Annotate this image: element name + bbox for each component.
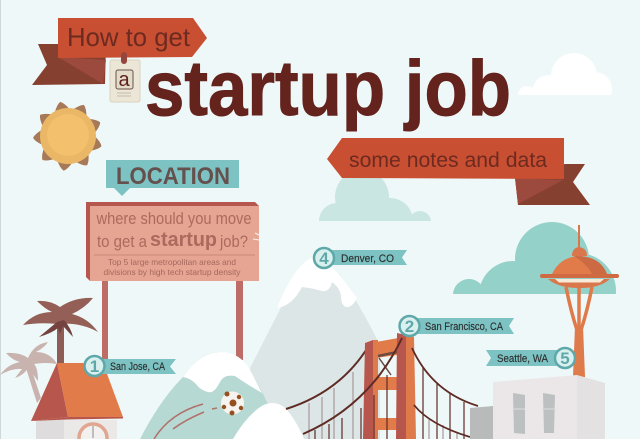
location tag 5: Seattle: Seattle, WA bbox=[497, 353, 549, 365]
location tag 2: San Francisco: 2 bbox=[405, 317, 414, 336]
location tag 4: Denver: 4 bbox=[319, 249, 329, 268]
heading: LOCATION bbox=[106, 160, 239, 196]
location tag 2: San Francisco: San Francisco, CA bbox=[425, 321, 504, 333]
back cable bbox=[286, 347, 368, 409]
location tag 1: San Jose: 1 bbox=[90, 357, 99, 376]
billboard posts bbox=[102, 280, 243, 370]
ribbon: How to get bbox=[32, 18, 207, 85]
mountain: Denver grey peak bbox=[250, 257, 380, 439]
windows bbox=[513, 393, 555, 434]
ribbon: some notes and data bbox=[327, 138, 590, 205]
location tag 1: San Jose: San Jose, CA bbox=[110, 361, 166, 373]
billboard panel bbox=[86, 202, 259, 281]
tower: Seattle Space Needle bbox=[540, 225, 619, 377]
location tag 5: Seattle bbox=[486, 348, 575, 368]
cloud: white top right bbox=[518, 53, 612, 95]
location tag 5: Seattle: 5 bbox=[560, 349, 570, 368]
billboard headline second line bbox=[97, 229, 248, 251]
needle legs bbox=[566, 287, 592, 330]
location tag 4: Denver: Denver, CO bbox=[341, 253, 394, 265]
icon: sun bbox=[33, 100, 104, 172]
icon: soccer ball bbox=[221, 392, 244, 416]
mountain: front white snow peak bbox=[233, 403, 304, 439]
ribbon text: How to get bbox=[67, 22, 191, 52]
tower near pillars bbox=[363, 340, 373, 439]
building: San Jose clock tower bbox=[31, 363, 123, 439]
billboard headline second line: job? bbox=[219, 233, 248, 251]
billboard headline: where should you move bbox=[96, 210, 252, 228]
billboard headline second line: startup bbox=[150, 229, 217, 251]
location tag 2: San Francisco bbox=[400, 316, 514, 336]
suspenders bbox=[315, 368, 464, 439]
icon: badge with letter a: a bbox=[118, 69, 130, 91]
billboard subtext: divisions by high tech startup density bbox=[104, 267, 241, 277]
icon: badge with letter a bbox=[110, 52, 140, 102]
icon: pale palm tree bbox=[0, 342, 57, 403]
billboard subtext: Top 5 large metropolitan areas and bbox=[108, 257, 236, 267]
billboard headline second line: to get a bbox=[97, 233, 148, 251]
location tag 4: Denver bbox=[314, 248, 407, 268]
motion lines bbox=[154, 404, 217, 439]
heading: LOCATION: LOCATION bbox=[116, 163, 230, 190]
billboard subtext bbox=[104, 257, 241, 277]
cloud: pale teal centre bbox=[319, 178, 431, 221]
back suspenders bbox=[309, 372, 457, 439]
mountain: teal snow peak with soccer ball bbox=[140, 352, 300, 439]
building: Seattle block bbox=[470, 375, 605, 439]
front cable bbox=[303, 338, 402, 434]
ribbon text: some notes and data bbox=[349, 148, 547, 172]
location tag 1: San Jose bbox=[84, 356, 176, 376]
icon: dark palm tree bbox=[23, 298, 98, 366]
clock face bbox=[79, 424, 107, 439]
bridge: Golden Gate bbox=[286, 333, 478, 439]
title: startup job: startup job bbox=[145, 44, 511, 132]
cloud: large teal right bbox=[453, 222, 616, 294]
